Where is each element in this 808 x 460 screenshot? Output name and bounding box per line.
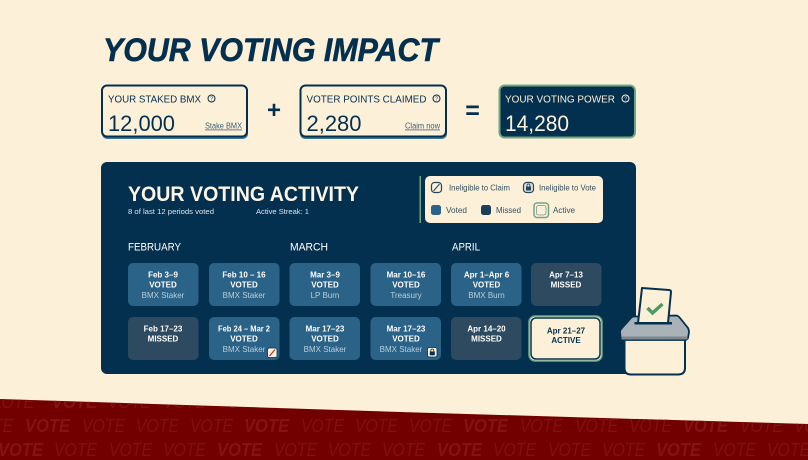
stat card: your staked BMX: ? (210, 96, 213, 102)
icon: ineligible to claim (268, 348, 277, 358)
card: Mar 3-9: Mar 3–9 (310, 270, 340, 280)
pattern row 2: VOTE (740, 416, 784, 436)
pattern row 3: VOTE (328, 440, 372, 460)
voted periods summary: 8 of last 12 periods voted (128, 207, 214, 216)
card: Mar 10-16: VOTED (392, 280, 420, 290)
month label: April: APRIL (452, 242, 480, 254)
card: Apr 14-20: Apr 14–20 (467, 324, 506, 334)
card: Mar 17-23 second: BMX Staker (380, 345, 423, 354)
legend: Ineligible to Vote (539, 184, 597, 192)
stat card: voter points claimed (300, 86, 447, 139)
stat card: your voting power (500, 86, 635, 138)
card: Feb 3-9 (128, 263, 198, 306)
card: Mar 3-9: LP Burn (311, 291, 339, 300)
card: Mar 17-23 second: Mar 17–23 (387, 324, 426, 334)
stat card: your voting power: YOUR VOTING POWER (505, 94, 615, 106)
legend: Active (553, 206, 576, 215)
pattern row 2: VOTE (463, 416, 509, 436)
legend: Voted (446, 206, 467, 215)
panel: voting activity (101, 162, 636, 374)
pattern row 1: VOTE (52, 392, 98, 412)
card: Mar 10-16 (370, 263, 441, 306)
pattern row 3: VOTE (274, 440, 318, 460)
pattern row 2: VOTE (136, 416, 180, 436)
card: Mar 17-23 second (370, 317, 441, 360)
pattern row 2: VOTE (409, 416, 453, 436)
card: Apr 14-20: MISSED (471, 334, 502, 344)
pattern row 2: VOTE (629, 416, 673, 436)
legend: Ineligible to Claim (449, 184, 510, 192)
legend (420, 176, 603, 223)
card: Feb 24-Mar 2: VOTED (230, 334, 258, 344)
title: YOUR VOTING IMPACT (103, 32, 440, 68)
pattern row 3: VOTE (656, 440, 702, 460)
card: Mar 3-9 (290, 263, 360, 306)
panel heading: YOUR VOTING ACTIVITY (128, 182, 359, 206)
pattern row 1: VOTE (217, 392, 261, 412)
active streak: Active Streak: 1 (256, 207, 309, 216)
card: Apr 21-27 active: Apr 21–27 (547, 326, 586, 336)
card: Apr 7-13: Apr 7–13 (549, 270, 583, 280)
month label: March: MARCH (290, 242, 328, 254)
card: Mar 17-23: Mar 17–23 (306, 324, 345, 334)
card: Feb 3-9: Feb 3–9 (148, 270, 178, 280)
card: Apr 7-13: MISSED (551, 280, 582, 290)
card: Apr 14-20 (451, 317, 522, 360)
pattern row 2: VOTE (82, 416, 126, 436)
pattern row 2 (0, 419, 808, 432)
stat card: voter points claimed: 2,280 (306, 111, 362, 136)
plus sign: + (267, 97, 281, 124)
pattern row 1: VOTE (327, 392, 371, 412)
month label: February: FEBRUARY (128, 242, 182, 254)
pattern row 3: VOTE (713, 440, 757, 460)
card: Feb 24-Mar 2: BMX Staker (223, 345, 266, 354)
card: Apr 21-27 active (529, 316, 602, 361)
pattern row 3: VOTE (109, 440, 153, 460)
pattern row 3: VOTE (493, 440, 537, 460)
pattern row 3: VOTE (54, 440, 98, 460)
card: Mar 17-23 (290, 317, 360, 360)
pattern row 3: VOTE (548, 440, 592, 460)
pattern row 3: VOTE (163, 440, 207, 460)
stat card: voter points claimed: VOTER POINTS CLAIMED (306, 94, 427, 106)
pattern row 1: VOTE (163, 392, 207, 412)
card: Feb 10-16 (209, 263, 280, 306)
icon: ballot box (620, 288, 689, 374)
pattern row 2: VOTE (301, 416, 345, 436)
card: Apr 1-Apr 6: VOTED (473, 280, 500, 290)
stat card: your staked BMX (102, 86, 248, 139)
card: Mar 17-23: VOTED (311, 334, 339, 344)
card: Feb 10-16: VOTED (230, 280, 258, 290)
card: Feb 10-16: Feb 10 – 16 (222, 270, 266, 280)
pattern row 2: VOTE (244, 416, 290, 436)
card: Mar 3-9: VOTED (311, 280, 339, 290)
card: Feb 17-23 (128, 317, 198, 360)
card: Feb 24-Mar 2 (209, 317, 280, 360)
card: Mar 10-16: Mar 10–16 (387, 270, 426, 280)
pattern row 1: VOTE (108, 392, 152, 412)
card: Apr 1-Apr 6: Apr 1–Apr 6 (464, 270, 510, 280)
pattern row 3: VOTE (217, 440, 263, 460)
card: Feb 3-9: VOTED (149, 280, 177, 290)
pattern row 2: VOTE (25, 416, 71, 436)
card: Feb 17-23: Feb 17–23 (144, 324, 183, 334)
equals sign: = (465, 97, 480, 125)
pattern row 2: VOTE (355, 416, 399, 436)
card: Feb 17-23: MISSED (148, 334, 179, 344)
pattern row 1: VOTE (271, 392, 317, 412)
stat card: your voting power: 14,280 (505, 111, 569, 136)
card: Apr 1-Apr 6 (451, 263, 522, 306)
card: Mar 10-16: Treasury (390, 291, 422, 300)
pattern row 2: VOTE (190, 416, 234, 436)
card: Feb 10-16: BMX Staker (223, 291, 266, 300)
pattern row 3: VOTE (602, 440, 646, 460)
stat card: voter points claimed: Claim now (405, 122, 440, 130)
icon: ineligible to vote (428, 348, 437, 357)
stat card: your staked BMX: YOUR STAKED BMX (108, 94, 201, 106)
card: Feb 3-9: BMX Staker (142, 291, 185, 300)
pattern row 2: VOTE (575, 416, 619, 436)
card: Apr 21-27 active: ACTIVE (551, 336, 581, 345)
pattern row 3: VOTE (437, 440, 483, 460)
card: Apr 7-13 (531, 263, 602, 306)
card: Apr 1-Apr 6: BMX Burn (468, 291, 505, 300)
pattern row 3 (0, 443, 808, 456)
stat card: your voting power: ? (624, 96, 627, 102)
stat card: your staked BMX: Stake BMX (205, 122, 243, 130)
pattern row 2: VOTE (520, 416, 564, 436)
banner: VOTE pattern (0, 399, 808, 460)
stat card: voter points claimed: ? (435, 96, 438, 102)
card: Mar 17-23 second: VOTED (392, 334, 420, 344)
card: Feb 24-Mar 2: Feb 24 – Mar 2 (218, 324, 271, 334)
pattern row 2: VOTE (683, 416, 729, 436)
legend: Missed (496, 206, 521, 215)
card: Mar 17-23: BMX Staker (304, 345, 347, 354)
stat card: your staked BMX: 12,000 (108, 111, 175, 136)
pattern row 1 (0, 399, 276, 408)
pattern row 3: VOTE (382, 440, 426, 460)
